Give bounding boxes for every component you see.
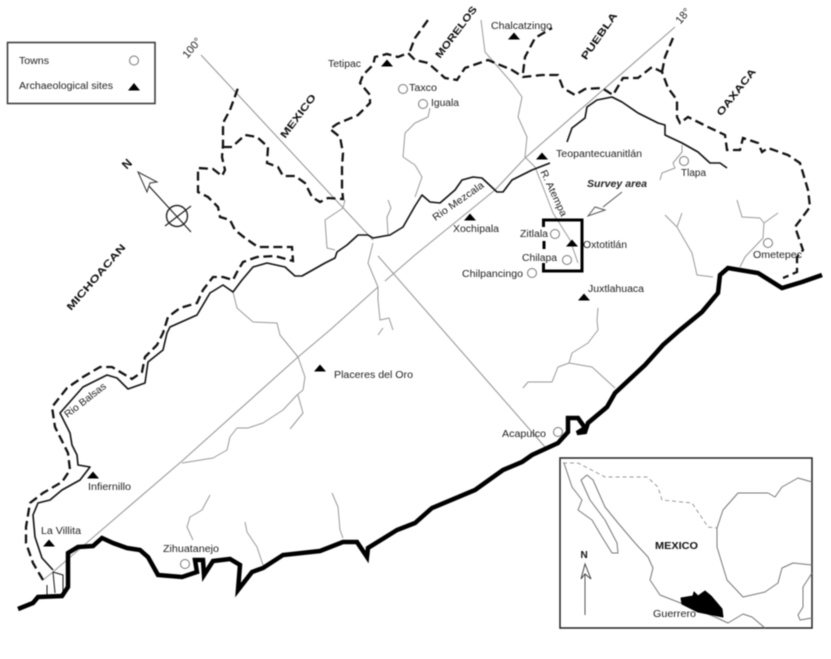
towns: Chilapa [522,253,557,264]
inset: labels: MEXICO [655,541,698,552]
towns: Zitlala [520,229,548,240]
towns: Chilpancingo [462,269,523,280]
inset: northern border [563,463,717,528]
river labels [63,168,569,421]
river labels: R. Atempa [538,168,569,219]
graticule labels: 100° [180,36,204,61]
Rio Balsas and Rio Mezcala [33,97,727,597]
graticule lines [43,27,675,580]
archaeological sites: Chalcatzingo [491,21,552,32]
north compass: N [119,156,135,172]
archaeological sites [41,21,644,546]
towns: Iguala [431,98,459,109]
region labels: MEXICO [279,92,319,141]
inset map of Mexico [560,458,812,628]
region labels [65,4,759,313]
towns: Ometepec [753,250,802,261]
legend: Towns [19,56,49,67]
towns: Taxco [409,83,437,94]
graticule labels: 18° [673,6,693,27]
river labels: Rio Mezcala [431,180,487,224]
archaeological sites: Infiernillo [88,482,131,493]
region labels: OAXACA [715,67,759,118]
region labels: PUEBLA [580,11,620,62]
archaeological sites: Oxtotitlán [583,240,627,251]
inset: north arrow [580,550,591,615]
Pacific coastline [18,268,822,609]
graticule labels [180,6,693,61]
region labels: MICHOACAN [65,242,128,313]
survey area label and arrow [587,179,647,216]
inset: Guerrero state [681,591,723,617]
towns: Zihuatanejo [163,544,219,555]
inset map of Mexico: Guerrero [653,609,696,620]
inset: Yucatan coast [798,573,812,620]
inset: Gulf coast [717,478,812,597]
archaeological sites: Placeres del Oro [334,370,413,381]
inset: north arrow: N [580,550,588,561]
north compass [119,156,191,232]
towns: Tlapa [681,168,706,179]
legend [8,42,155,104]
river labels: Rio Balsas [63,381,109,421]
archaeological sites: Xochipala [453,224,499,235]
minor rivers [182,20,778,565]
legend: Archaeological sites [19,81,113,92]
inset: Pacific coast [564,463,765,628]
archaeological sites: Teopantecuanitlán [556,149,642,160]
towns: Acapulco [502,429,546,440]
towns [163,83,802,568]
region labels: MORELOS [434,4,480,61]
archaeological sites: Juxtlahuaca [588,284,644,295]
archaeological sites: La Villita [41,526,81,537]
archaeological sites: Tetipac [328,59,361,70]
survey area box [544,220,582,271]
survey area label and arrow: Survey area [587,179,647,190]
